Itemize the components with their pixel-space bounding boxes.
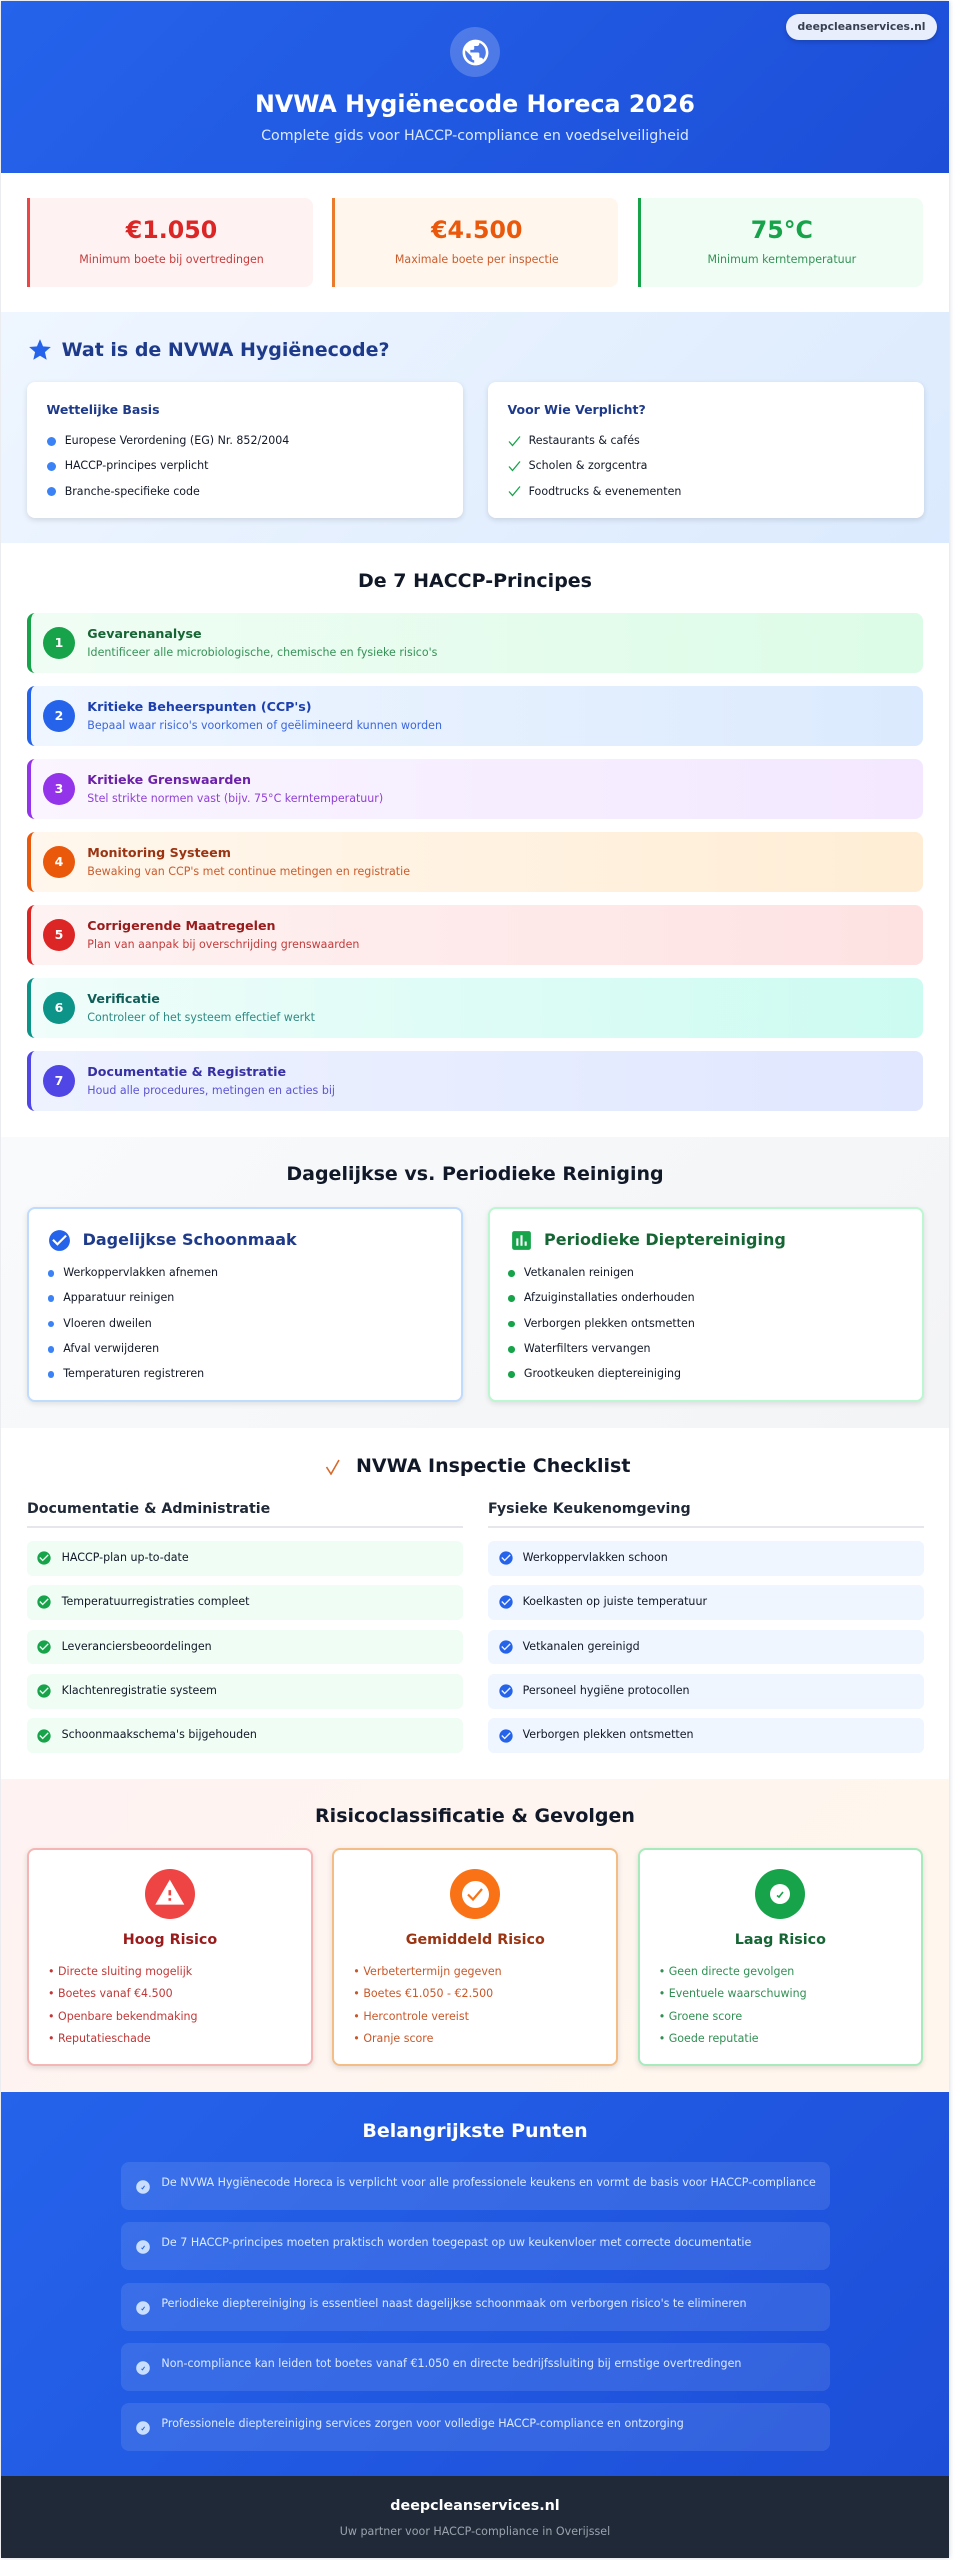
principle 4: 4 [55, 854, 63, 869]
title: NVWA Hygiënecode Horeca 2026 [255, 90, 695, 118]
footer brand: deepcleanservices.nl [390, 2498, 560, 2514]
card: low risk [638, 1848, 923, 2066]
takeaway 2: De 7 HACCP-principes moeten praktisch worden toegepast op uw keukenvloer met correcte documentatie [161, 2236, 751, 2249]
check item [488, 1585, 924, 1620]
check item: Koelkasten op juiste temperatuur [523, 1595, 707, 1608]
takeaway 3: Periodieke dieptereiniging is essentieel naast dagelijkse schoonmaak om verborgen risico's te elimineren [161, 2297, 747, 2310]
panel: risk classification [1, 1779, 949, 2092]
card: legal basis [27, 382, 463, 518]
card: who must comply [488, 382, 924, 518]
principle 3: Kritieke Grenswaarden [87, 772, 251, 787]
card: high risk: • Openbare bekendmaking [48, 2010, 198, 2022]
principle 4: Monitoring Systeem [87, 845, 231, 860]
card: periodic deep cleaning: Grootkeuken dieptereiniging [524, 1367, 681, 1380]
panel: HACCP principles [27, 570, 923, 1111]
principle 6 [27, 978, 923, 1038]
card: periodic deep cleaning: Periodieke Dieptereiniging [544, 1230, 786, 1249]
card: high risk [27, 1848, 313, 2066]
card: medium risk: Gemiddeld Risico [406, 1932, 545, 1948]
principle 5: Corrigerende Maatregelen [87, 918, 276, 933]
card: high risk: • Reputatieschade [48, 2032, 151, 2045]
stat: minimum fine [27, 198, 313, 287]
principle 4: Bewaking van CCP's met continue metingen en registratie [87, 865, 410, 878]
principle 6: Controleer of het systeem effectief werkt [87, 1011, 315, 1024]
card: periodic deep cleaning: Vetkanalen reinigen [524, 1266, 634, 1279]
takeaway 5: Professionele dieptereiniging services zorgen voor volledige HACCP-compliance en ontzorging [161, 2417, 684, 2430]
principle 3: 3 [55, 781, 63, 796]
panel: what is the code [1, 312, 949, 543]
card: medium risk: • Hercontrole vereist [353, 2010, 469, 2022]
stat: maximum fine: €4.500 [431, 216, 522, 244]
principle 4 [27, 832, 923, 892]
card: low risk: • Geen directe gevolgen [659, 1965, 794, 1978]
card: legal basis: Europese Verordening (EG) Nr. 852/2004 [65, 434, 289, 447]
check item: HACCP-plan up-to-date [62, 1551, 189, 1564]
check item [488, 1718, 924, 1753]
principle 5: 5 [55, 927, 63, 942]
principle 2: 2 [55, 708, 63, 723]
card: daily cleaning: Vloeren dweilen [63, 1317, 152, 1330]
badge: deepcleanservices.nl: deepcleanservices.nl [798, 20, 925, 33]
check item: Vetkanalen gereinigd [523, 1640, 640, 1653]
takeaway 1 [121, 2162, 830, 2210]
check item: Werkoppervlakken schoon [523, 1551, 668, 1564]
card: medium risk: • Verbetertermijn gegeven [353, 1965, 502, 1978]
principle 6: Verificatie [87, 991, 160, 1006]
stat: core temperature [638, 198, 923, 287]
card: legal basis: HACCP-principes verplicht [65, 459, 208, 472]
card: medium risk: • Boetes €1.050 - €2.500 [353, 1987, 493, 2000]
principle 1: 1 [55, 635, 63, 650]
stat: minimum fine: Minimum boete bij overtredingen [79, 253, 264, 266]
card: high risk: • Boetes vanaf €4.500 [48, 1987, 173, 2000]
takeaway 5 [121, 2403, 830, 2451]
check item [488, 1630, 924, 1664]
subheading: documentation: Documentatie & Administratie [27, 1501, 270, 1517]
badge: deepcleanservices.nl [786, 14, 937, 40]
heading: Dagelijkse vs. Periodieke Reiniging [286, 1163, 664, 1185]
principle 7: 7 [55, 1073, 63, 1088]
check item [27, 1541, 463, 1576]
card: who must comply: Scholen & zorgcentra [529, 459, 647, 472]
takeaway 3 [121, 2283, 830, 2331]
card: legal basis: Branche-specifieke code [65, 485, 200, 498]
card: low risk: • Groene score [659, 2010, 742, 2022]
header banner [1, 1, 949, 172]
heading: Risicoclassificatie & Gevolgen [315, 1805, 635, 1827]
card: who must comply: Restaurants & cafés [529, 434, 640, 447]
icon: star [29, 339, 51, 360]
check item [27, 1718, 463, 1753]
principle 7: Documentatie & Registratie [87, 1064, 286, 1079]
check item: Verborgen plekken ontsmetten [523, 1728, 694, 1741]
stat: minimum fine: €1.050 [126, 216, 217, 244]
takeaway 2 [121, 2222, 830, 2270]
card: low risk: • Goede reputatie [659, 2032, 759, 2045]
principle 2: Kritieke Beheerspunten (CCP's) [87, 699, 312, 714]
card: daily cleaning: Werkoppervlakken afnemen [63, 1266, 218, 1279]
card: periodic deep cleaning: Afzuiginstallaties onderhouden [524, 1291, 695, 1304]
card: medium risk: • Oranje score [353, 2032, 433, 2045]
check item [488, 1541, 924, 1576]
stat: maximum fine: Maximale boete per inspectie [395, 253, 559, 266]
subtitle: Complete gids voor HACCP-compliance en voedselveiligheid [261, 128, 689, 144]
principle 2: Bepaal waar risico's voorkomen of geëlimineerd kunnen worden [87, 719, 442, 732]
heading: NVWA Inspectie Checklist [356, 1455, 630, 1477]
card: low risk: Laag Risico [735, 1932, 826, 1948]
card: daily cleaning: Dagelijkse Schoonmaak [83, 1230, 297, 1249]
card: medium risk [332, 1848, 618, 2066]
heading: Belangrijkste Punten [362, 2120, 588, 2142]
card: periodic deep cleaning: Waterfilters vervangen [524, 1342, 651, 1355]
panel: daily vs periodic cleaning [1, 1137, 949, 1428]
principle 1: Identificeer alle microbiologische, chemische en fysieke risico's [87, 646, 437, 659]
card: high risk: • Directe sluiting mogelijk [48, 1965, 192, 1978]
check item [488, 1674, 924, 1708]
stat: core temperature: 75°C [751, 216, 813, 244]
card: daily cleaning: Apparatuur reinigen [63, 1291, 174, 1304]
stat: core temperature: Minimum kerntemperatuur [707, 253, 856, 266]
principle 7: Houd alle procedures, metingen en acties bij [87, 1084, 335, 1097]
icon: orange check [326, 1460, 340, 1475]
principle 5 [27, 905, 923, 965]
check item: Schoonmaakschema's bijgehouden [62, 1728, 257, 1741]
heading: Wat is de NVWA Hygiënecode? [62, 339, 389, 361]
card: periodic deep cleaning [488, 1207, 924, 1402]
footer [1, 2476, 949, 2558]
card: low risk: • Eventuele waarschuwing [659, 1987, 807, 2000]
check item [27, 1630, 463, 1664]
check item: Klachtenregistratie systeem [62, 1684, 217, 1697]
card: who must comply: Voor Wie Verplicht? [508, 402, 646, 417]
check item: Leveranciersbeoordelingen [62, 1640, 212, 1653]
card: daily cleaning [27, 1207, 463, 1402]
icon: globe [450, 27, 500, 77]
check item: Personeel hygiëne protocollen [523, 1684, 690, 1697]
panel: key statistics [27, 198, 923, 287]
card: daily cleaning: Temperaturen registreren [63, 1367, 204, 1380]
check item: Temperatuurregistraties compleet [62, 1595, 249, 1608]
subheading: kitchen: Fysieke Keukenomgeving [488, 1501, 691, 1517]
principle 3 [27, 759, 923, 819]
card: high risk: Hoog Risico [123, 1932, 217, 1948]
takeaway 1: De NVWA Hygiënecode Horeca is verplicht voor alle professionele keukens en vormt de basis voor HACCP-compliance [161, 2176, 816, 2189]
principle 1 [27, 613, 923, 673]
card: periodic deep cleaning: Verborgen plekken ontsmetten [524, 1317, 695, 1330]
card: daily cleaning: Afval verwijderen [63, 1342, 159, 1355]
check item [27, 1674, 463, 1708]
takeaway 4 [121, 2343, 830, 2391]
panel: inspection checklist [27, 1455, 924, 1753]
check item [27, 1585, 463, 1620]
card: legal basis: Wettelijke Basis [46, 402, 160, 417]
heading: De 7 HACCP-Principes [358, 570, 592, 592]
panel: key takeaways [1, 2092, 949, 2476]
card: who must comply: Foodtrucks & evenementen [529, 485, 681, 498]
principle 1: Gevarenanalyse [87, 626, 202, 641]
principle 6: 6 [55, 1000, 63, 1015]
footer tagline: Uw partner voor HACCP-compliance in Overijssel [340, 2525, 610, 2538]
principle 5: Plan van aanpak bij overschrijding grenswaarden [87, 938, 359, 951]
principle 7 [27, 1051, 923, 1111]
principle 3: Stel strikte normen vast (bijv. 75°C kerntemperatuur) [87, 792, 383, 805]
stat: maximum fine [332, 198, 618, 287]
takeaway 4: Non-compliance kan leiden tot boetes vanaf €1.050 en directe bedrijfssluiting bij ernstige overtredingen [161, 2357, 741, 2370]
principle 2 [27, 686, 923, 746]
